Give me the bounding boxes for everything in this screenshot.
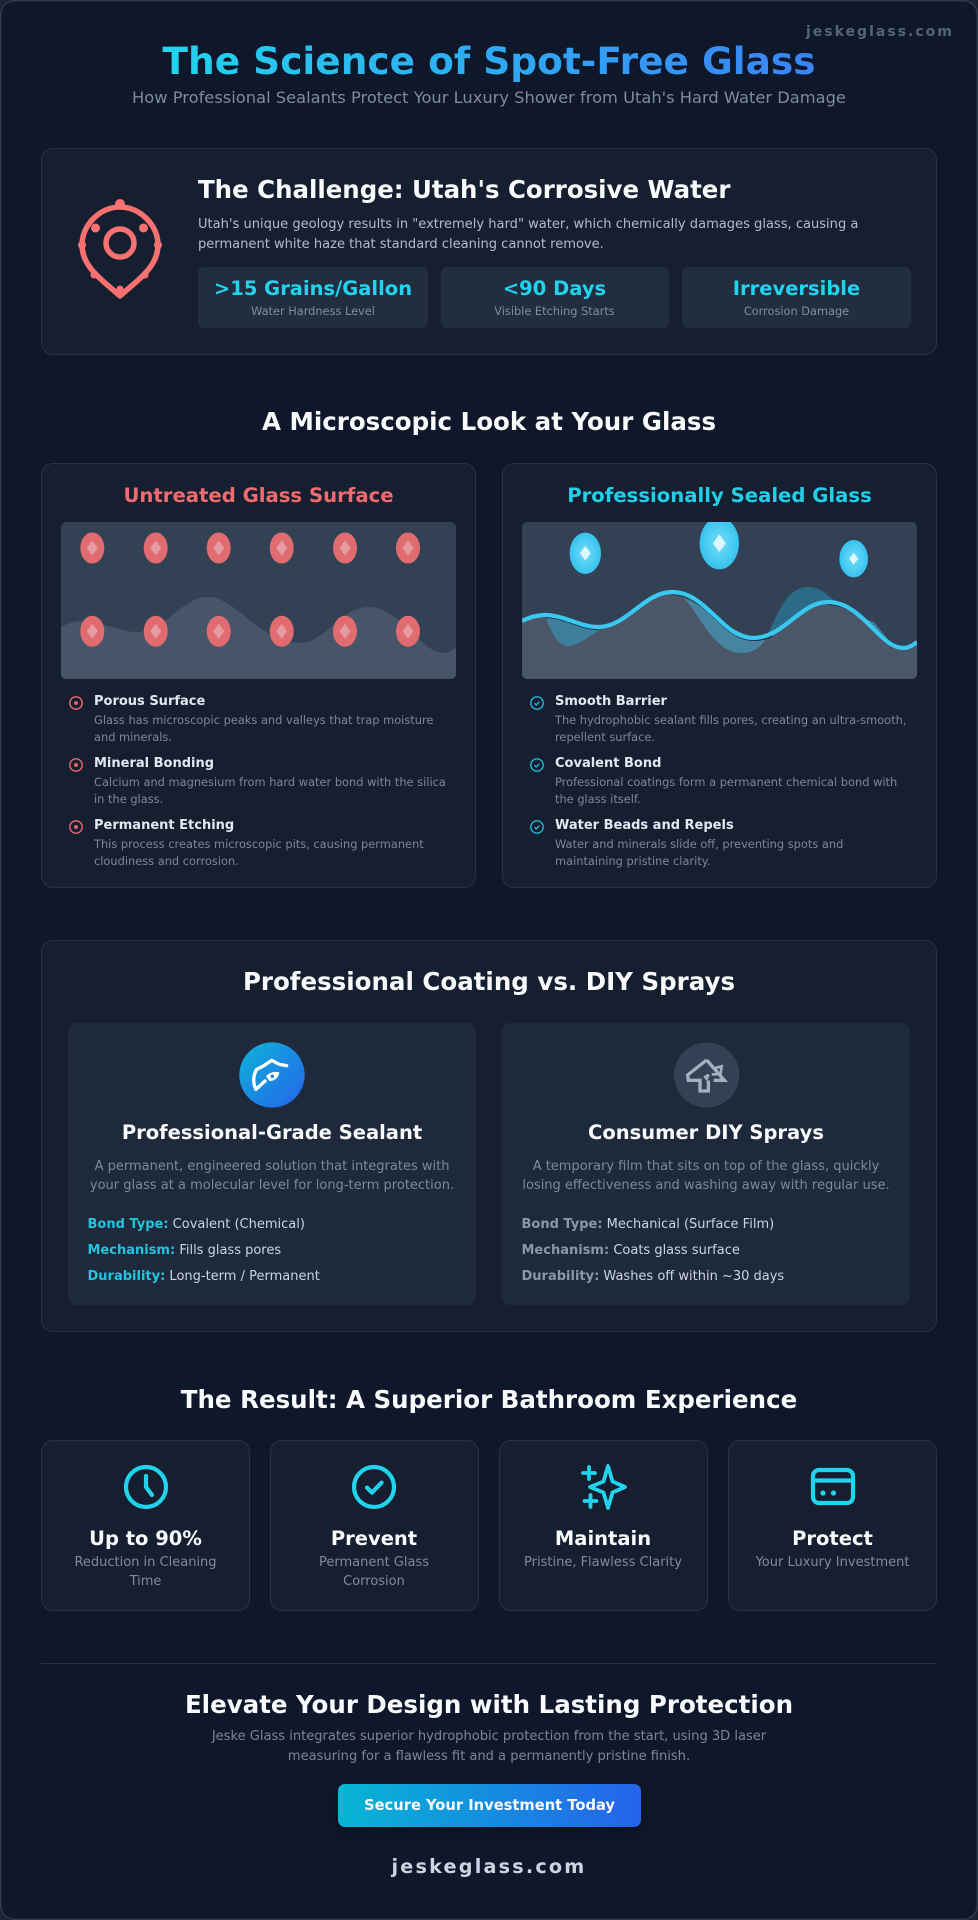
challenge description: permanent white haze that standard cleaning cannot remove. (198, 237, 604, 252)
item text (555, 713, 906, 744)
item text (555, 837, 843, 868)
heading: comparison: Professional Coating vs. DIY Sprays (243, 967, 735, 996)
icon: check circle (530, 820, 544, 834)
stat: visible etching: Visible Etching Starts (494, 304, 615, 318)
stat: water hardness (198, 267, 428, 328)
result text: Pristine, Flawless Clarity (524, 1554, 682, 1570)
heading: the challenge: The Challenge: Utah's Corrosive Water (198, 175, 730, 204)
panel heading: untreated: Untreated Glass Surface (123, 484, 394, 507)
item text: and minerals. (94, 730, 172, 744)
icon: location pin (78, 199, 162, 299)
item: porous surface (69, 694, 433, 744)
icon: check (352, 1464, 396, 1510)
card description: losing effectiveness and washing away with regular use. (522, 1178, 890, 1193)
result text: Your Luxury Investment (756, 1554, 909, 1570)
result text: Time (130, 1574, 161, 1589)
heading: the result: The Result: A Superior Bathroom Experience (181, 1385, 797, 1414)
result text: Corrosion (343, 1574, 405, 1589)
item title: Water Beads and Repels (555, 818, 734, 833)
call to action heading: Elevate Your Design with Lasting Protection (185, 1690, 793, 1719)
button (338, 1784, 641, 1827)
icon: x circle (69, 820, 83, 834)
spec: bond type: Bond Type: Mechanical (Surface Film) (522, 1217, 774, 1232)
spec: mechanism: Mechanism: Fills glass pores (88, 1243, 281, 1258)
subtitle: How Professional Sealants Protect Your Luxury Shower from Utah's Hard Water Damage (132, 88, 846, 107)
item: water beads (530, 818, 843, 868)
result text: Permanent Glass (319, 1554, 429, 1570)
item: covalent bond (530, 756, 897, 806)
title: The Science of Spot-Free Glass (162, 39, 816, 83)
card description: A permanent, engineered solution that integrates with (95, 1158, 449, 1174)
panel: comparison (41, 940, 937, 1332)
result card: prevent corrosion (270, 1440, 478, 1611)
item text: cloudiness and corrosion. (94, 854, 239, 868)
panel: untreated glass (41, 463, 476, 888)
spec: durability: Durability: Washes off within ~30 days (522, 1269, 784, 1284)
item: permanent etching (69, 818, 424, 868)
item: mineral bonding (69, 756, 446, 806)
item text: Water and minerals slide off, preventing spots and (555, 837, 843, 851)
panel: sealed glass (502, 463, 937, 888)
icon: credit card (810, 1468, 856, 1506)
item title: Smooth Barrier (555, 694, 667, 709)
result title: Prevent (331, 1527, 417, 1550)
icon: check circle (530, 696, 544, 710)
card description (90, 1158, 454, 1193)
watermark: jeskeglass.com (806, 24, 954, 40)
call to action text (211, 1729, 766, 1764)
diagram: sealed surface (522, 522, 917, 679)
item text: The hydrophobic sealant fills pores, creating an ultra-smooth, (555, 713, 906, 727)
icon: x circle (69, 758, 83, 772)
item text (94, 837, 424, 868)
heading: microscopic look: A Microscopic Look at Your Glass (262, 407, 716, 436)
card: DIY sprays (502, 1023, 910, 1305)
icon: house arrow (674, 1042, 740, 1108)
challenge description: Utah's unique geology results in "extremely hard" water, which chemically damages glass, causing a (198, 217, 858, 232)
call to action text: measuring for a flawless fit and a permanently pristine finish. (288, 1749, 690, 1764)
item title: Covalent Bond (555, 756, 661, 771)
result title: Maintain (555, 1527, 651, 1550)
item text: maintaining pristine clarity. (555, 854, 710, 868)
card: professional sealant (68, 1023, 476, 1305)
stat: visible etching: <90 Days (503, 277, 606, 300)
card description: your glass at a molecular level for long-term protection. (90, 1178, 454, 1193)
spec: bond type: Bond Type: Covalent (Chemical) (88, 1217, 305, 1232)
icon: check circle (530, 758, 544, 772)
result text: Reduction in Cleaning (74, 1554, 217, 1570)
item text: in the glass. (94, 792, 163, 806)
icon: shield leaf (239, 1042, 305, 1108)
icon: clock (124, 1464, 168, 1510)
result text (74, 1554, 217, 1589)
result title: Protect (792, 1527, 873, 1550)
item title: Porous Surface (94, 694, 205, 709)
spec: durability: Durability: Long-term / Permanent (88, 1269, 320, 1284)
diagram: untreated surface (61, 522, 456, 679)
icon: x circle (69, 696, 83, 710)
result card: protect investment (728, 1440, 937, 1611)
panel heading: sealed: Professionally Sealed Glass (567, 484, 872, 507)
result card: maintain clarity (498, 1440, 708, 1611)
item text: Calcium and magnesium from hard water bond with the silica (94, 775, 446, 789)
stat: corrosion damage: Irreversible (733, 277, 860, 300)
item text: Glass has microscopic peaks and valleys that trap moisture (94, 713, 433, 727)
item text: repellent surface. (555, 730, 655, 744)
icon: sparkle (581, 1464, 627, 1510)
card description (522, 1158, 890, 1193)
item title: Permanent Etching (94, 818, 234, 833)
item text: Professional coatings form a permanent chemical bond with (555, 775, 897, 789)
stat: visible etching (440, 267, 668, 328)
panel: the challenge (41, 148, 937, 355)
footer url: jeskeglass.com (391, 1855, 586, 1878)
item title: Mineral Bonding (94, 756, 214, 771)
result card: cleaning time (41, 1440, 250, 1611)
challenge description (198, 217, 858, 252)
item text: This process creates microscopic pits, causing permanent (94, 837, 424, 851)
card title: Professional-Grade Sealant (122, 1121, 422, 1144)
spec: mechanism: Mechanism: Coats glass surface (522, 1243, 740, 1258)
call to action text: Jeske Glass integrates superior hydrophobic protection from the start, using 3D laser (212, 1729, 766, 1744)
item text (555, 775, 897, 806)
stat: water hardness: >15 Grains/Gallon (214, 277, 412, 300)
result text (319, 1554, 429, 1589)
item text: the glass itself. (555, 792, 641, 806)
card description: A temporary film that sits on top of the glass, quickly (533, 1158, 879, 1174)
item text (94, 713, 433, 744)
result title: Up to 90% (89, 1527, 202, 1550)
card title: Consumer DIY Sprays (588, 1121, 824, 1144)
item text (94, 775, 446, 806)
stat: corrosion damage: Corrosion Damage (744, 304, 849, 318)
stat: water hardness: Water Hardness Level (251, 304, 375, 318)
button: Secure Your Investment Today (364, 1797, 615, 1814)
item: smooth barrier (530, 694, 906, 744)
stat: corrosion damage (682, 267, 911, 328)
